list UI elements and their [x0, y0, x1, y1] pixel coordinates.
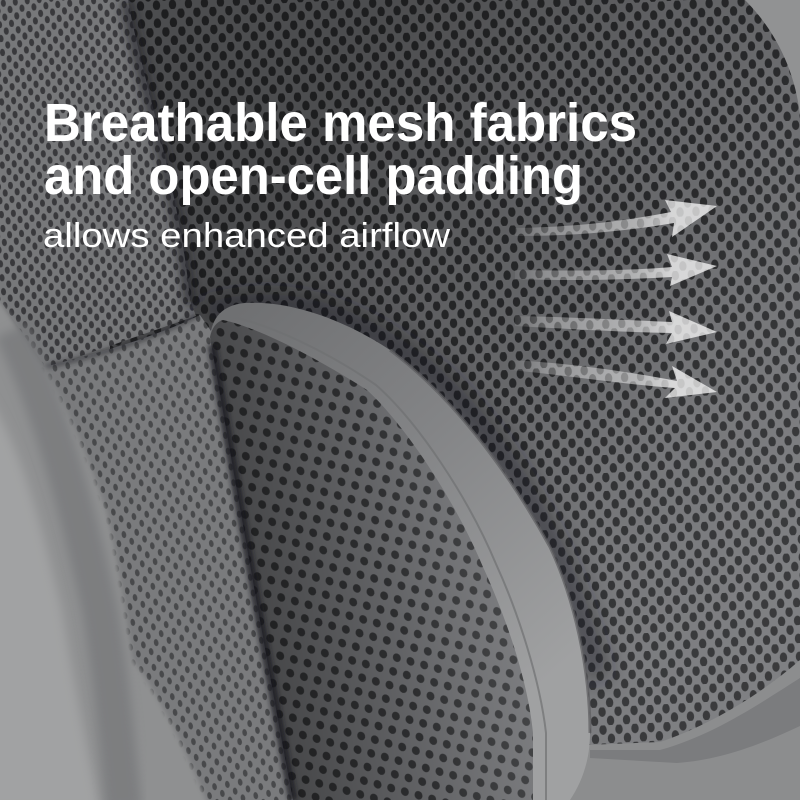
- bolster mesh: [210, 320, 533, 800]
- panel: far-left grey fabric: [0, 270, 210, 800]
- bolster fabric edge: [210, 303, 590, 800]
- arrow 1: [515, 200, 717, 237]
- heading: and open-cell padding: [44, 146, 583, 206]
- arrow 2: [515, 254, 717, 286]
- far-left fabric fold shadow: [12, 330, 124, 800]
- panel: upper-left mesh pad: [0, 0, 196, 368]
- bolster shading: [210, 320, 533, 800]
- panel: side bolster: [210, 303, 590, 800]
- far-left fabric light area: [0, 385, 100, 800]
- panel: seam shadow behind bolster: [200, 304, 598, 680]
- panel: middle mesh strip: [40, 315, 296, 800]
- arrow 4: [510, 360, 717, 398]
- heading: Breathable mesh fabrics: [44, 93, 637, 153]
- heading: [44, 93, 637, 206]
- panel: bottom-right fabric: [570, 660, 800, 800]
- subheading: allows enhanced airflow: [43, 217, 451, 255]
- panel: top-right fabric corner: [745, 0, 800, 115]
- arrow 3: [515, 311, 717, 344]
- panel: bottom-right seam band: [590, 678, 800, 763]
